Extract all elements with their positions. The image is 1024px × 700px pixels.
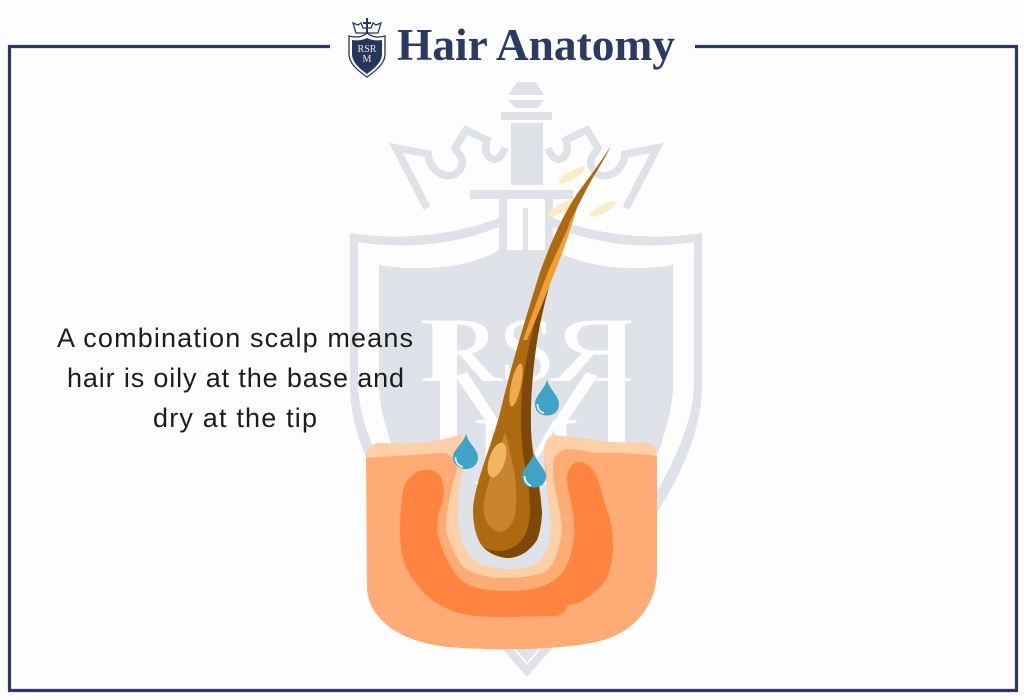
description text [57, 323, 413, 433]
watermark: shield and sword logo [350, 82, 702, 677]
watermark: monogram letters: R [549, 299, 635, 401]
illustration: hair strand [473, 146, 611, 558]
watermark: monogram letters [418, 299, 635, 506]
watermark: monogram letters: R [418, 299, 504, 401]
logo: shield emblem [349, 18, 385, 77]
logo: shield emblem: M [363, 54, 372, 65]
skin top light band right [544, 435, 657, 468]
description text: A combination scalp means [57, 323, 413, 353]
skin deep orange layer [400, 462, 613, 617]
oil drop top right [535, 380, 559, 416]
watermark: monogram letters: M [472, 398, 580, 506]
skin top light band left [366, 434, 463, 470]
oil drop left [453, 434, 478, 469]
oil drop center [522, 453, 546, 488]
logo: shield emblem: RSR [358, 44, 377, 55]
title: Hair Anatomy [397, 20, 675, 70]
illustration: sebum highlights [546, 164, 618, 220]
illustration: scalp cross-section [366, 434, 657, 649]
illustration: oil drops [453, 380, 559, 488]
description text: dry at the tip [153, 403, 317, 433]
skin light inner band [446, 458, 562, 578]
description text: hair is oily at the base and [67, 363, 404, 393]
watermark: monogram letters: S [498, 299, 556, 401]
skin outer layer [366, 434, 657, 649]
